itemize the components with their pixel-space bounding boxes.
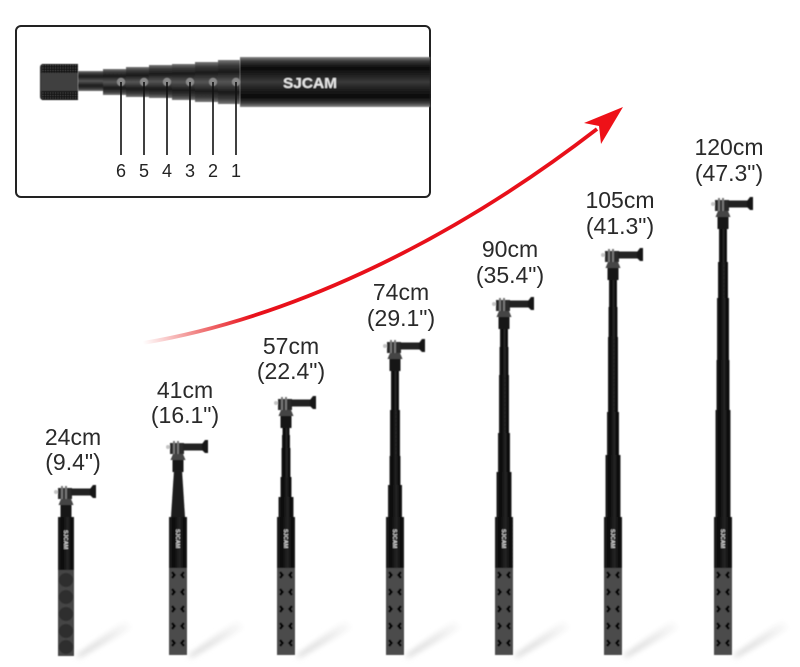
- label: 105cm: [585, 187, 655, 239]
- label: 41cm: 41cm: [157, 377, 213, 403]
- label: 24cm: (9.4"): [45, 449, 101, 475]
- knurled knob: [40, 64, 78, 100]
- label: 90cm: (35.4"): [476, 262, 544, 288]
- label: 41cm: (16.1"): [151, 402, 219, 428]
- label: 74cm: [367, 279, 435, 331]
- main tube with logo: [240, 57, 430, 107]
- label: 120cm: [694, 134, 764, 186]
- label: 105cm: (41.3"): [586, 213, 654, 239]
- pole: 41cm: [166, 440, 244, 657]
- section numbers: 6: [116, 161, 126, 181]
- panel: detail of numbered pole sections: [16, 26, 430, 197]
- section numbers: [116, 161, 241, 181]
- pole: 105cm: [601, 248, 679, 657]
- label: 90cm: [476, 236, 544, 288]
- label: 120cm: 120cm: [694, 134, 764, 160]
- pole: 57cm: [274, 396, 352, 657]
- section numbers: 4: [162, 161, 172, 181]
- label: 57cm: [257, 333, 325, 384]
- label: 74cm: 74cm: [373, 279, 429, 305]
- pole: 120cm: [711, 197, 789, 657]
- pole: 74cm: [383, 339, 461, 657]
- section pin holes: [117, 78, 240, 86]
- pole: 90cm: [492, 297, 570, 657]
- label: 57cm: 57cm: [263, 333, 319, 359]
- label: 90cm: 90cm: [482, 236, 538, 262]
- main tube with logo: SJCAM: [283, 75, 337, 92]
- pole: 24cm: [54, 485, 132, 657]
- label: 41cm: [151, 377, 219, 428]
- label: 120cm: (47.3"): [695, 160, 763, 186]
- label: 74cm: (29.1"): [367, 305, 435, 331]
- label: 24cm: [45, 424, 101, 475]
- telescopic segments: [78, 60, 240, 104]
- section numbers: 3: [185, 161, 195, 181]
- label: 57cm: (22.4"): [257, 358, 325, 384]
- section numbers: 1: [231, 161, 241, 181]
- pole: 24cm: SJCAM: [62, 530, 68, 550]
- section numbers: 5: [139, 161, 149, 181]
- arrow: growth curve: [143, 107, 623, 343]
- section numbers: 2: [208, 161, 218, 181]
- label: 105cm: 105cm: [585, 187, 655, 213]
- leader lines: [121, 82, 236, 155]
- label: 24cm: 24cm: [45, 424, 101, 450]
